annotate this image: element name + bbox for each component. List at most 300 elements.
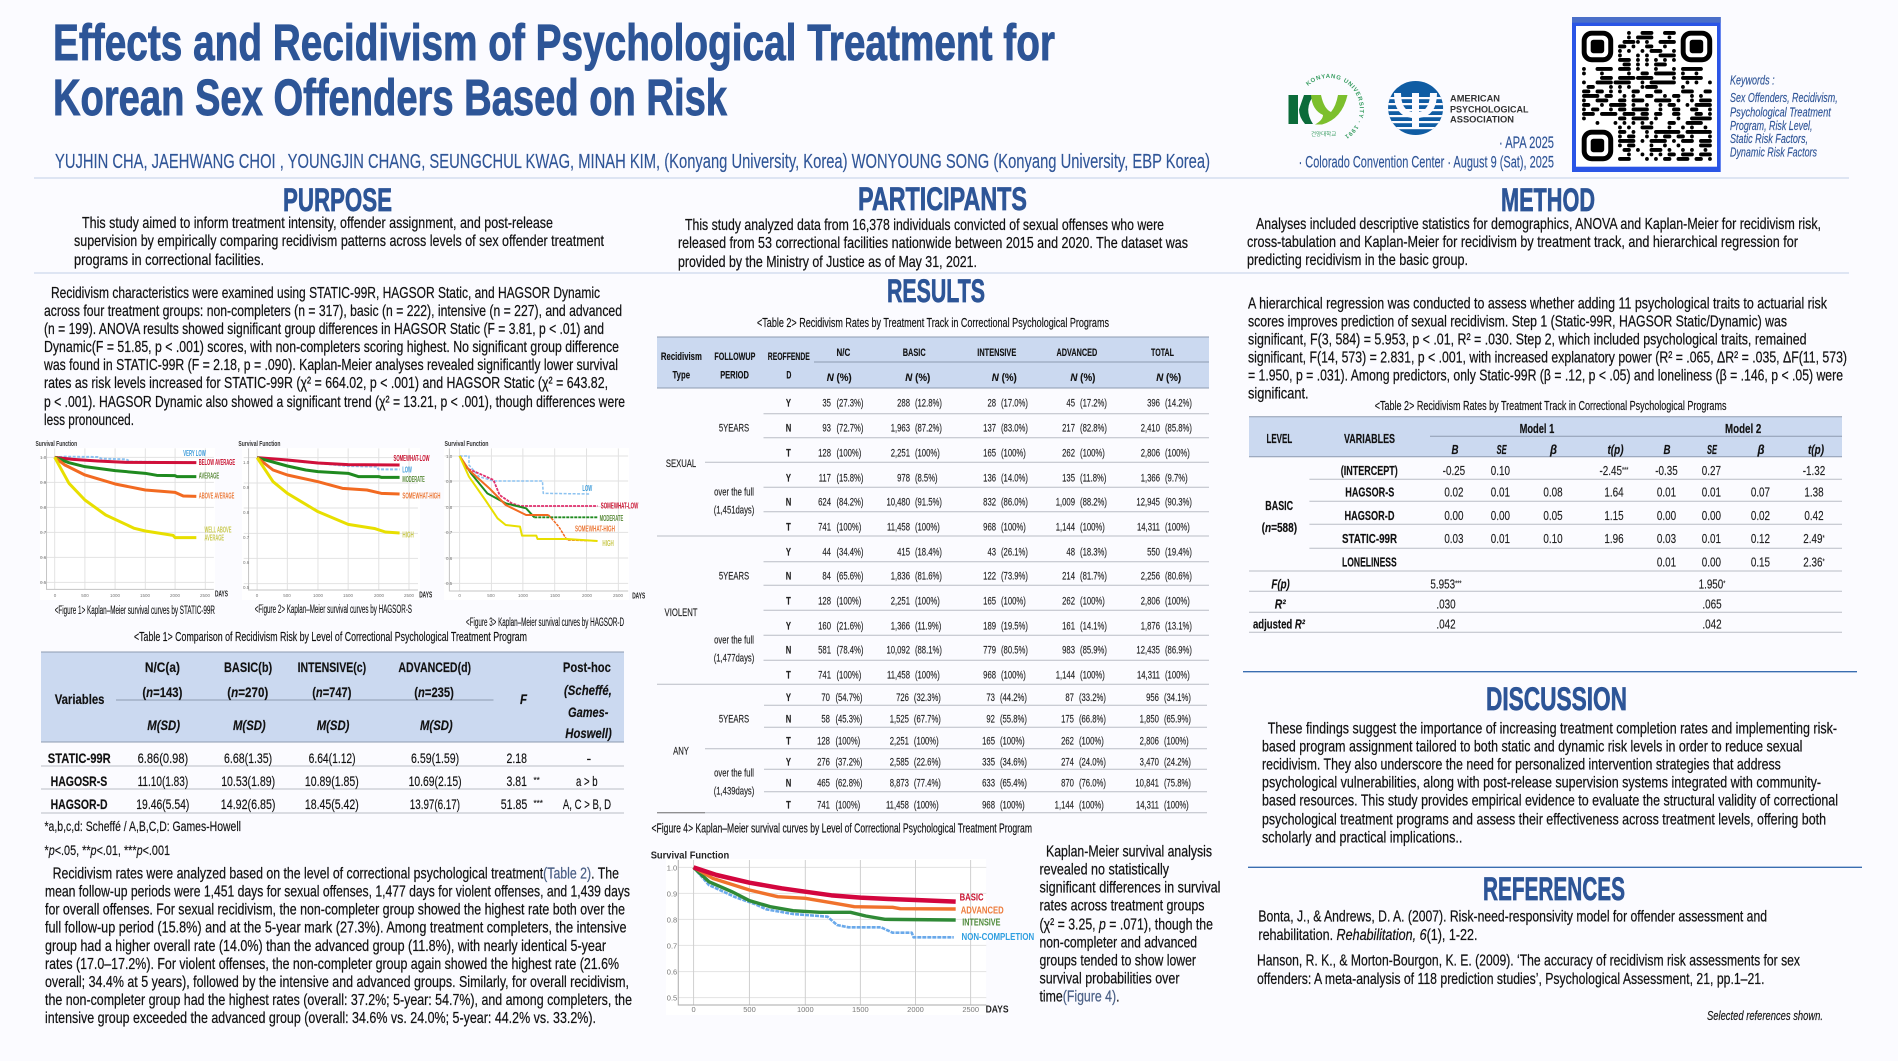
chart: figure 4 survival curves by treatment level: 0.9 xyxy=(667,889,677,898)
chart: figure 3 survival curves by HAGSOR-D: LOW xyxy=(582,484,592,493)
table 2 rows: any: 70 xyxy=(821,692,830,704)
chart: figure 3 survival curves by HAGSOR-D: 0.7 xyxy=(446,530,453,535)
title: Korean Sex Offenders Based on Risk xyxy=(53,69,727,126)
heading: participants: PARTICIPANTS xyxy=(858,181,1027,217)
table 1 header: M(SD) xyxy=(420,717,453,733)
table 3 values: -2.45 xyxy=(1599,465,1629,478)
panel: purpose xyxy=(74,182,604,269)
text block: participants xyxy=(678,217,1188,271)
logo: American Psychological Association: ASSOCIATION xyxy=(1450,114,1514,125)
table 2 row labels: 5YEARS xyxy=(719,713,749,726)
text block: recidivism characteristics: p < .001). HAGSOR Dynamic also showed a significant trend (χ² = 13.21, p < .001), though differences were xyxy=(44,394,625,411)
table 2 rows: any: (45.3%) xyxy=(835,713,862,726)
table 1 row: HAGOSR-S: 11.10(1.83) xyxy=(138,773,188,789)
table 3 values: 0.00 xyxy=(1491,510,1510,523)
table 2 row labels: (1,439days) xyxy=(714,785,754,798)
table 2 rows: violent: (80.5%) xyxy=(1001,644,1028,657)
chart: figure 3 survival curves by HAGSOR-D: SOMEWHAT-LOW xyxy=(601,502,639,511)
chart: figure 2 survival curves by HAGSOR-S: Survival Function xyxy=(238,439,281,448)
chart: figure 2 survival curves by HAGSOR-S: SOMEWHAT-LOW xyxy=(394,454,430,463)
conference details: · Colorado Convention Center · August 9 (Sat), 2025 xyxy=(1299,153,1554,172)
logo: Konyang University: KONYANG UNIVERSITY · 1991 xyxy=(1306,74,1364,138)
text block: Kaplan-Meier summary: groups tended to show lower xyxy=(1040,953,1197,970)
table 3 values: 0.05 xyxy=(1543,510,1563,523)
table 2 rows: any: (76.0%) xyxy=(1079,777,1106,790)
table 2 rows: sexual: 12,945 xyxy=(1136,496,1160,509)
table 2 rows: sexual: 2,410 xyxy=(1141,422,1160,435)
chart: figure 1 survival curves by STATIC-99R: 2000 xyxy=(170,593,181,598)
table 3 values: 2.49 xyxy=(1803,533,1825,546)
table 3 header: β xyxy=(1757,443,1765,457)
table 2 rows: violent: (81.6%) xyxy=(915,570,942,583)
table 2 caption: <Table 2> Recidivism Rates by Treatment Track in Correctional Psychological Programs xyxy=(757,316,1109,330)
text block: Kaplan-Meier summary: significant differences in survival xyxy=(1040,880,1220,897)
table 2 rows: sexual: (88.2%) xyxy=(1080,496,1107,509)
table 2 row labels: Y xyxy=(786,546,792,559)
table 2 row labels: VIOLENT xyxy=(665,607,698,619)
text block: purpose: supervision by empirically comparing recidivism patterns across levels of sex offender treatment xyxy=(74,233,604,250)
table 2 row labels: 5YEARS xyxy=(719,570,749,583)
table 2 rows: any: 274 xyxy=(1061,756,1074,769)
table 2 rows: any: 741 xyxy=(817,799,830,812)
table 1 row: STATIC-99R: 6.86(0.98) xyxy=(138,750,188,766)
table 1 header: Post-hoc xyxy=(563,659,611,675)
table 2 rows: sexual: 978 xyxy=(897,472,910,485)
chart: figure 1 survival curves by STATIC-99R: 0.7 xyxy=(40,530,47,535)
table 2 header: N (%) xyxy=(827,372,852,384)
logo: American Psychological Association xyxy=(1388,81,1529,135)
table 2 row labels xyxy=(665,397,792,812)
table 1 row: HAGOSR-S: 10.53(1.89) xyxy=(221,773,275,789)
table 2 rows: sexual: 968 xyxy=(983,521,996,534)
table 2 rows: violent: 1,836 xyxy=(891,570,910,583)
table 3 values: 0.01 xyxy=(1491,487,1510,500)
table 1 row: HAGOSR-S: HAGOSR-S xyxy=(51,773,107,789)
figure captions: <Figure 3> Kaplan–Meier survival curves by HAGSOR-D xyxy=(466,617,624,629)
table 3 values: 0.03 xyxy=(1444,533,1464,546)
text block: hierarchical regression: significant. xyxy=(1248,385,1309,402)
table 3 values: 0.42 xyxy=(1804,510,1824,523)
chart: figure 1 survival curves by STATIC-99R: WELL ABOVE xyxy=(204,525,232,534)
table 2 rows: any: (65.4%) xyxy=(1000,777,1027,790)
chart: figure 4 survival curves by treatment level: 2500 xyxy=(962,1005,979,1014)
table 3 values: 0.01 xyxy=(1491,533,1510,546)
table 3 values: .042 xyxy=(1436,618,1456,632)
table 3 values: .042 xyxy=(1702,618,1722,632)
table 2 rows: violent: (13.1%) xyxy=(1165,620,1192,633)
table 2 rows: sexual: (17.0%) xyxy=(1001,397,1028,410)
table 2 rows: sexual: 2,806 xyxy=(1141,447,1160,460)
table 2 row labels: (1,451days) xyxy=(714,504,754,517)
table 2 header: Recidivism xyxy=(661,351,702,363)
text block: participants: released from 53 correctional facilities nationwide between 2015 and 2020. The dataset was xyxy=(678,235,1188,252)
table 2 rows: violent: (100%) xyxy=(836,595,861,608)
table 2 row labels: T xyxy=(786,799,791,812)
table 2 rows: any: 87 xyxy=(1065,692,1074,704)
table 1 header: Variables xyxy=(55,691,105,707)
chart: figure 4 survival curves by treatment level: 1.0 xyxy=(667,863,677,872)
text block: purpose: programs in correctional facilities. xyxy=(74,252,264,269)
table 2 rows: sexual: 10,480 xyxy=(886,496,910,509)
conference details xyxy=(1299,133,1554,172)
table 2 rows: sexual: 1,144 xyxy=(1056,521,1075,534)
table 2 rows: sexual: 217 xyxy=(1062,422,1075,435)
table 1 notes xyxy=(44,818,241,858)
table 3 values: 1.96 xyxy=(1604,533,1624,546)
table 1 header: Games- xyxy=(568,704,609,720)
panel: references xyxy=(1248,867,1862,1023)
table 2 rows: any: (100%) xyxy=(1000,799,1025,812)
table 2 rows: sexual: (85.8%) xyxy=(1165,422,1192,435)
table 2 row labels: N xyxy=(786,496,791,509)
chart: figure 2 survival curves by HAGSOR-S: 0.9 xyxy=(243,485,250,490)
table 2 rows: violent: (88.1%) xyxy=(915,644,942,657)
table 1 row: STATIC-99R: 6.59(1.59) xyxy=(411,750,459,766)
chart: figure 1 survival curves by STATIC-99R: Survival Function xyxy=(36,439,77,448)
table 1 header: Hoswell) xyxy=(565,725,612,741)
table 2 rows: any: 1,850 xyxy=(1140,713,1159,726)
table 3 row labels: adjusted R² xyxy=(1253,617,1306,631)
table 2 rows: any: (34.1%) xyxy=(1164,692,1191,704)
table 1 row: STATIC-99R: 6.64(1.12) xyxy=(309,750,356,766)
panel: participants xyxy=(678,181,1188,271)
table 3 values: * xyxy=(1823,534,1825,542)
table 2 rows: any: 335 xyxy=(982,756,995,769)
table 3 values: .065 xyxy=(1702,598,1722,612)
table 2 rows: violent: 779 xyxy=(983,644,996,657)
chart: figure 4 survival curves by treatment level: 2000 xyxy=(907,1005,924,1014)
table 2 rows: any: 10,841 xyxy=(1135,777,1159,790)
table 2 rows: sexual: (83.0%) xyxy=(1001,422,1028,435)
table 2 rows: any: 2,251 xyxy=(890,735,909,748)
table 2 rows: sexual: 165 xyxy=(983,447,996,460)
table 2 row labels: N xyxy=(786,713,791,726)
table 1: recidivism risk by level xyxy=(41,652,624,813)
table 2 rows: violent: 1,876 xyxy=(1141,620,1160,633)
table 1 row: HAGSOR-D: 51.85 xyxy=(501,796,527,812)
table 3 values: 0.07 xyxy=(1751,487,1770,500)
table 2 rows: violent: 128 xyxy=(818,595,831,608)
table 3 values: 0.27 xyxy=(1702,465,1721,478)
table 2 rows: violent: (81.7%) xyxy=(1080,570,1107,583)
table 2 rows: violent: (34.4%) xyxy=(836,546,863,559)
table 2 rows: violent: (100%) xyxy=(1001,669,1026,682)
chart: figure 4 survival curves by treatment level: 500 xyxy=(743,1005,756,1014)
table 2 rows: sexual: 1,963 xyxy=(891,422,910,435)
table 3 caption: <Table 2> Recidivism Rates by Treatment Track in Correctional Psychological Programs xyxy=(1375,399,1726,413)
chart: figure 2 survival curves by HAGSOR-S: LOW xyxy=(402,466,412,475)
table 2 rows: any: 956 xyxy=(1146,692,1159,704)
title: Effects and Recidivism of Psychological Treatment for xyxy=(53,14,1055,71)
table 1 row: HAGOSR-S: 10.89(1.85) xyxy=(305,773,359,789)
chart: figure 1 survival curves by STATIC-99R: 0.8 xyxy=(40,505,47,510)
chart: figure 1 survival curves by STATIC-99R: 1.0 xyxy=(40,455,47,460)
table 2 rows: violent: (18.4%) xyxy=(915,546,942,559)
table 2 rows: any: (65.9%) xyxy=(1164,713,1191,726)
text block: Kaplan-Meier summary: Kaplan-Meier survival analysis xyxy=(1046,844,1212,861)
table 2 rows: sexual: 396 xyxy=(1147,397,1160,410)
table 3 header: B xyxy=(1664,443,1670,457)
table 3 row labels: STATIC-99R xyxy=(1342,532,1397,546)
table 2 rows: violent: (26.1%) xyxy=(1001,546,1028,559)
table 2 rows: violent: 581 xyxy=(818,644,831,657)
table 2 rows: any: (54.7%) xyxy=(835,692,862,704)
table 2 rows: any: 14,311 xyxy=(1136,799,1159,812)
table 1 row: HAGSOR-D: 14.92(6.85) xyxy=(221,796,276,812)
table 3 values: *** xyxy=(1622,466,1629,474)
table 2 rows: violent: (65.6%) xyxy=(836,570,863,583)
conference details: · APA 2025 xyxy=(1499,133,1554,152)
text block: hierarchical regression xyxy=(1248,295,1847,402)
table 2 rows: sexual: 262 xyxy=(1062,447,1075,460)
table 3 values: * xyxy=(1823,558,1825,566)
table 2 rows: any: 3,470 xyxy=(1140,756,1159,769)
chart: figure 1 survival curves by STATIC-99R: 1500 xyxy=(140,593,151,598)
table 2 rows: violent: (100%) xyxy=(1001,595,1026,608)
chart: figure 3 survival curves by HAGSOR-D: 0 xyxy=(458,593,461,598)
table 2 rows: any: (34.6%) xyxy=(1000,756,1027,769)
table 2 rows: any: 2,806 xyxy=(1140,735,1159,748)
table 3 values: -1.32 xyxy=(1803,465,1825,478)
table 1 row: HAGOSR-S: 3.81 xyxy=(506,773,527,789)
table 1 row: HAGOSR-S xyxy=(51,773,598,789)
table 1 row: HAGSOR-D xyxy=(51,796,611,812)
table 2 rows: any: (100%) xyxy=(1079,799,1104,812)
table 3 row labels: BASIC xyxy=(1265,499,1293,513)
table 2 rows: any: (24.0%) xyxy=(1079,756,1106,769)
chart: figure 1 survival curves by STATIC-99R: AVERAGE xyxy=(199,472,220,481)
table 2 rows: any: 165 xyxy=(982,735,995,748)
table 2 row labels: T xyxy=(786,447,791,460)
table 1 header: BASIC(b) xyxy=(224,659,272,675)
table 3 values: 0.08 xyxy=(1543,487,1563,500)
table 2 rows: sexual: (100%) xyxy=(1165,521,1190,534)
table 3 values: * xyxy=(1723,580,1726,588)
chart: figure 2 survival curves by HAGSOR-S: 1000 xyxy=(313,593,324,598)
text block: recidivism characteristics: Dynamic(F = 51.85, p < .001) scores, with non-completers scoring highest. No significant group difference xyxy=(44,339,619,356)
table 2 header: REOFFENDE xyxy=(768,351,810,363)
table 3 values: .030 xyxy=(1436,598,1456,612)
chart: figure 4 survival curves by treatment level xyxy=(651,850,1034,1016)
table 2 header: ADVANCED xyxy=(1056,347,1097,359)
table 2 rows: sexual: (100%) xyxy=(915,447,940,460)
table 2 rows: any: 11,458 xyxy=(886,799,909,812)
table 2 rows: violent: 160 xyxy=(818,620,831,633)
table 1 header: ADVANCED(d) xyxy=(398,659,471,675)
chart: figure 2 survival curves by HAGSOR-S: 0 xyxy=(256,593,259,598)
table 2 rows: violent: (19.5%) xyxy=(1001,620,1028,633)
chart: figure 2 survival curves by HAGSOR-S: 0.5 xyxy=(243,585,250,590)
table 2 rows: sexual: (100%) xyxy=(915,521,940,534)
chart: figure 1 survival curves by STATIC-99R: DAYS xyxy=(215,590,228,599)
table 2 rows: violent: 968 xyxy=(983,669,996,682)
table 3 header: B xyxy=(1452,443,1458,457)
icon: QR code xyxy=(1572,17,1721,172)
keywords: Dynamic Risk Factors xyxy=(1730,146,1817,160)
table 3 values: 0.00 xyxy=(1444,510,1464,523)
text block: references xyxy=(1257,909,1800,988)
table 2 rows: violent: (100%) xyxy=(1080,595,1105,608)
table 2 rows: any: (33.2%) xyxy=(1079,692,1106,704)
text block: Kaplan-Meier summary: (χ² = 3.25, p = .071), though the xyxy=(1040,916,1213,933)
chart: figure 2 survival curves by HAGSOR-S: 2000 xyxy=(374,593,385,598)
chart: figure 3 survival curves by HAGSOR-D: 0.8 xyxy=(446,505,453,510)
table 2 rows: violent: (100%) xyxy=(1165,669,1190,682)
table 3 header: β xyxy=(1549,443,1557,457)
chart: figure 3 survival curves by HAGSOR-D: 2500 xyxy=(613,593,624,598)
table 1 row: HAGSOR-D: A, C > B, D xyxy=(563,796,611,812)
table 2 header: Type xyxy=(672,369,690,381)
table 3 row labels: LONELINESS xyxy=(1342,556,1397,570)
table 2 header: N/C xyxy=(836,347,850,359)
table 3 values: 0.01 xyxy=(1702,533,1721,546)
table 3 values: *** xyxy=(1455,580,1462,588)
table 2 rows: any: 276 xyxy=(817,756,830,769)
table 1 row: HAGOSR-S: a > b xyxy=(576,773,598,789)
table 2 rows: any: (44.2%) xyxy=(1000,692,1027,704)
table 2: recidivism rates by treatment track xyxy=(657,337,1209,813)
table 3 values: 0.00 xyxy=(1702,510,1721,523)
table 2 rows: violent: 12,435 xyxy=(1136,644,1160,657)
chart: figure 3 survival curves by HAGSOR-D: DAYS xyxy=(632,591,646,600)
table 2 rows: sexual: (11.8%) xyxy=(1080,472,1106,485)
table 2 rows: sexual: (100%) xyxy=(836,521,861,534)
chart: figure 2 survival curves by HAGSOR-S: 1.0 xyxy=(243,460,250,465)
table 2 header: D xyxy=(786,369,791,381)
table 2 rows: sexual: 741 xyxy=(818,521,831,534)
table 2 rows: violent: 84 xyxy=(822,570,831,583)
logo: Konyang University: 건양대학교 xyxy=(1311,130,1336,138)
table 2 rows: violent: (100%) xyxy=(1080,669,1105,682)
chart: figure 1 survival curves by STATIC-99R: 0.6 xyxy=(40,555,47,560)
table 3 values: 0.03 xyxy=(1657,533,1676,546)
text block: discussion: scholarly and practical implications.. xyxy=(1262,830,1462,847)
table 2 rows: any xyxy=(817,692,1191,812)
table 3 values: -0.35 xyxy=(1655,465,1678,478)
table 3 header: t(p) xyxy=(1808,443,1824,457)
logo: American Psychological Association: PSYCHOLOGICAL xyxy=(1450,104,1529,115)
table 2 rows: any: 8,873 xyxy=(890,777,909,790)
table 1 notes: *a,b,c,d: Scheffé / A,B,C,D: Games-Howell xyxy=(44,818,241,834)
table 3 values: 1.38 xyxy=(1804,487,1824,500)
table 2 row labels: Y xyxy=(786,472,792,485)
chart: figure 4 survival curves by treatment level: 0 xyxy=(692,1005,696,1014)
chart: figure 3 survival curves by HAGSOR-D: 500 xyxy=(487,593,495,598)
chart: figure 3 survival curves by HAGSOR-D: SOMEWHAT-HIGH xyxy=(575,524,615,533)
text block: recidivism rates: full follow-up period (15.8%) and at the 5-year mark (27.3%). Among treatment completers, the intensive xyxy=(45,919,627,936)
chart: figure 1 survival curves by STATIC-99R: AVERAGE xyxy=(204,534,224,543)
chart: figure 2 survival curves by HAGSOR-S: 1500 xyxy=(343,593,354,598)
chart: figure 1 survival curves by STATIC-99R: VERY LOW xyxy=(183,449,206,458)
text block: recidivism rates: intensive group exceeded the advanced group (overall: 34.6% vs. 24.0%; 5-year: 44.2% vs. 33.2%). xyxy=(45,1010,596,1027)
table 2 rows: sexual: (72.7%) xyxy=(836,422,863,435)
table 1 header: N/C(a) xyxy=(145,659,180,675)
table 2 rows: sexual: (8.5%) xyxy=(915,472,938,485)
note: selected references: Selected references shown. xyxy=(1707,1008,1823,1023)
table 2 row labels: ANY xyxy=(673,745,689,758)
table 2 rows: any: (100%) xyxy=(1000,735,1025,748)
table 2 rows: violent: 165 xyxy=(983,595,996,608)
table 2 rows: violent: 741 xyxy=(818,669,831,682)
table 3 values: 0.01 xyxy=(1657,487,1676,500)
table 2 rows: any: 968 xyxy=(982,799,995,812)
table 2 rows: violent: (86.9%) xyxy=(1165,644,1192,657)
table 3 header: Model 2 xyxy=(1725,422,1761,436)
table 2 rows: any: (100%) xyxy=(835,735,860,748)
figure captions: <Figure 1> Kaplan–Meier survival curves by STATIC-99R xyxy=(55,605,215,617)
table 1 caption: <Table 1> Comparison of Recidivism Risk by Level of Correctional Psychological Treatment Program xyxy=(134,630,527,644)
keywords: Program, Risk Level, xyxy=(1730,119,1812,133)
table 1 header: M(SD) xyxy=(317,717,350,733)
table 2 rows: sexual: (100%) xyxy=(1001,521,1026,534)
table 1 header: (n=270) xyxy=(227,684,268,700)
table 2 rows: sexual: (86.0%) xyxy=(1001,496,1028,509)
table 3 header: VARIABLES xyxy=(1344,432,1395,446)
table 2 rows: any: (66.8%) xyxy=(1079,713,1106,726)
chart: figure 1 survival curves by STATIC-99R: 0.9 xyxy=(40,480,47,485)
table 2 rows: violent: (11.9%) xyxy=(915,620,941,633)
table 2 rows: violent: 10,092 xyxy=(886,644,910,657)
text block: discussion xyxy=(1262,720,1838,847)
table 2 rows: violent: (100%) xyxy=(915,669,940,682)
table 2 rows: sexual: (14.2%) xyxy=(1165,397,1192,410)
table 2 rows: any: (62.8%) xyxy=(835,777,862,790)
table 2 rows: sexual: (100%) xyxy=(836,447,861,460)
text block: recidivism rates: mean follow-up periods were 1,451 days for sexual offenses, 1,477 days for violent offenses, and 1,439 days xyxy=(45,883,630,900)
chart: figure 4 survival curves by treatment level: NON-COMPLETION xyxy=(962,932,1034,943)
table 3 values: 0.01 xyxy=(1657,557,1676,570)
table 2 row labels: N xyxy=(786,644,791,657)
text block: recidivism rates: for overall offenses. For sexual recidivism, the non-completer group showed the highest rate both over the xyxy=(45,901,625,918)
table 2 rows: violent: (100%) xyxy=(1165,595,1190,608)
table 2 row labels: Y xyxy=(786,620,792,633)
chart: figure 3 survival curves by HAGSOR-D: Survival Function xyxy=(444,439,489,448)
table 2 rows: sexual: (91.5%) xyxy=(915,496,942,509)
table 2 rows: sexual: 624 xyxy=(818,496,831,509)
keywords xyxy=(1730,73,1838,160)
table 2 rows: sexual: 28 xyxy=(987,397,996,410)
chart: figure 4 survival curves by treatment level: 0.6 xyxy=(667,967,677,976)
chart: figure 2 survival curves by HAGSOR-S: SOMEWHAT-HIGH xyxy=(402,492,441,501)
table 2 rows: any: (100%) xyxy=(1079,735,1104,748)
table 2 rows: sexual: (100%) xyxy=(1165,447,1190,460)
table 2 rows: sexual: 93 xyxy=(822,422,831,435)
table 3 row labels: HAGSOR-D xyxy=(1344,509,1394,523)
figure captions: <Figure 2> Kaplan–Meier survival curves by HAGSOR-S xyxy=(255,604,412,616)
table 1 row: STATIC-99R: 2.18 xyxy=(506,750,527,766)
table 2 rows: sexual: 35 xyxy=(822,397,831,410)
table 1 row: STATIC-99R xyxy=(48,750,592,766)
text block: participants: provided by the Ministry of Justice as of May 31, 2021. xyxy=(678,254,977,271)
table 2 rows: sexual: 128 xyxy=(818,447,831,460)
text block: purpose xyxy=(74,215,604,269)
heading: references: REFERENCES xyxy=(1483,871,1625,907)
table 2 rows: sexual xyxy=(818,397,1192,534)
table 2 rows: violent: (80.6%) xyxy=(1165,570,1192,583)
table 1 row: STATIC-99R: 6.68(1.35) xyxy=(224,750,272,766)
text block: recidivism rates: rates (17.0–17.2%). For violent offenses, the non-completer group again showed the highest rate (21.6% xyxy=(45,956,619,973)
text block: Kaplan-Meier summary: survival probabilities over xyxy=(1040,971,1180,988)
keywords: Static Risk Factors, xyxy=(1730,132,1808,146)
table 2 rows: any: (22.6%) xyxy=(914,756,941,769)
title xyxy=(53,14,1055,126)
table 2 rows: sexual: 288 xyxy=(897,397,910,410)
chart: figure 1 survival curves by STATIC-99R xyxy=(36,439,235,600)
table 1 row: HAGSOR-D: 13.97(6.17) xyxy=(410,796,460,812)
table 2 rows: violent: (19.4%) xyxy=(1165,546,1192,559)
table 1 row: HAGSOR-D: HAGSOR-D xyxy=(51,796,108,812)
table 2 rows: violent: 214 xyxy=(1062,570,1075,583)
